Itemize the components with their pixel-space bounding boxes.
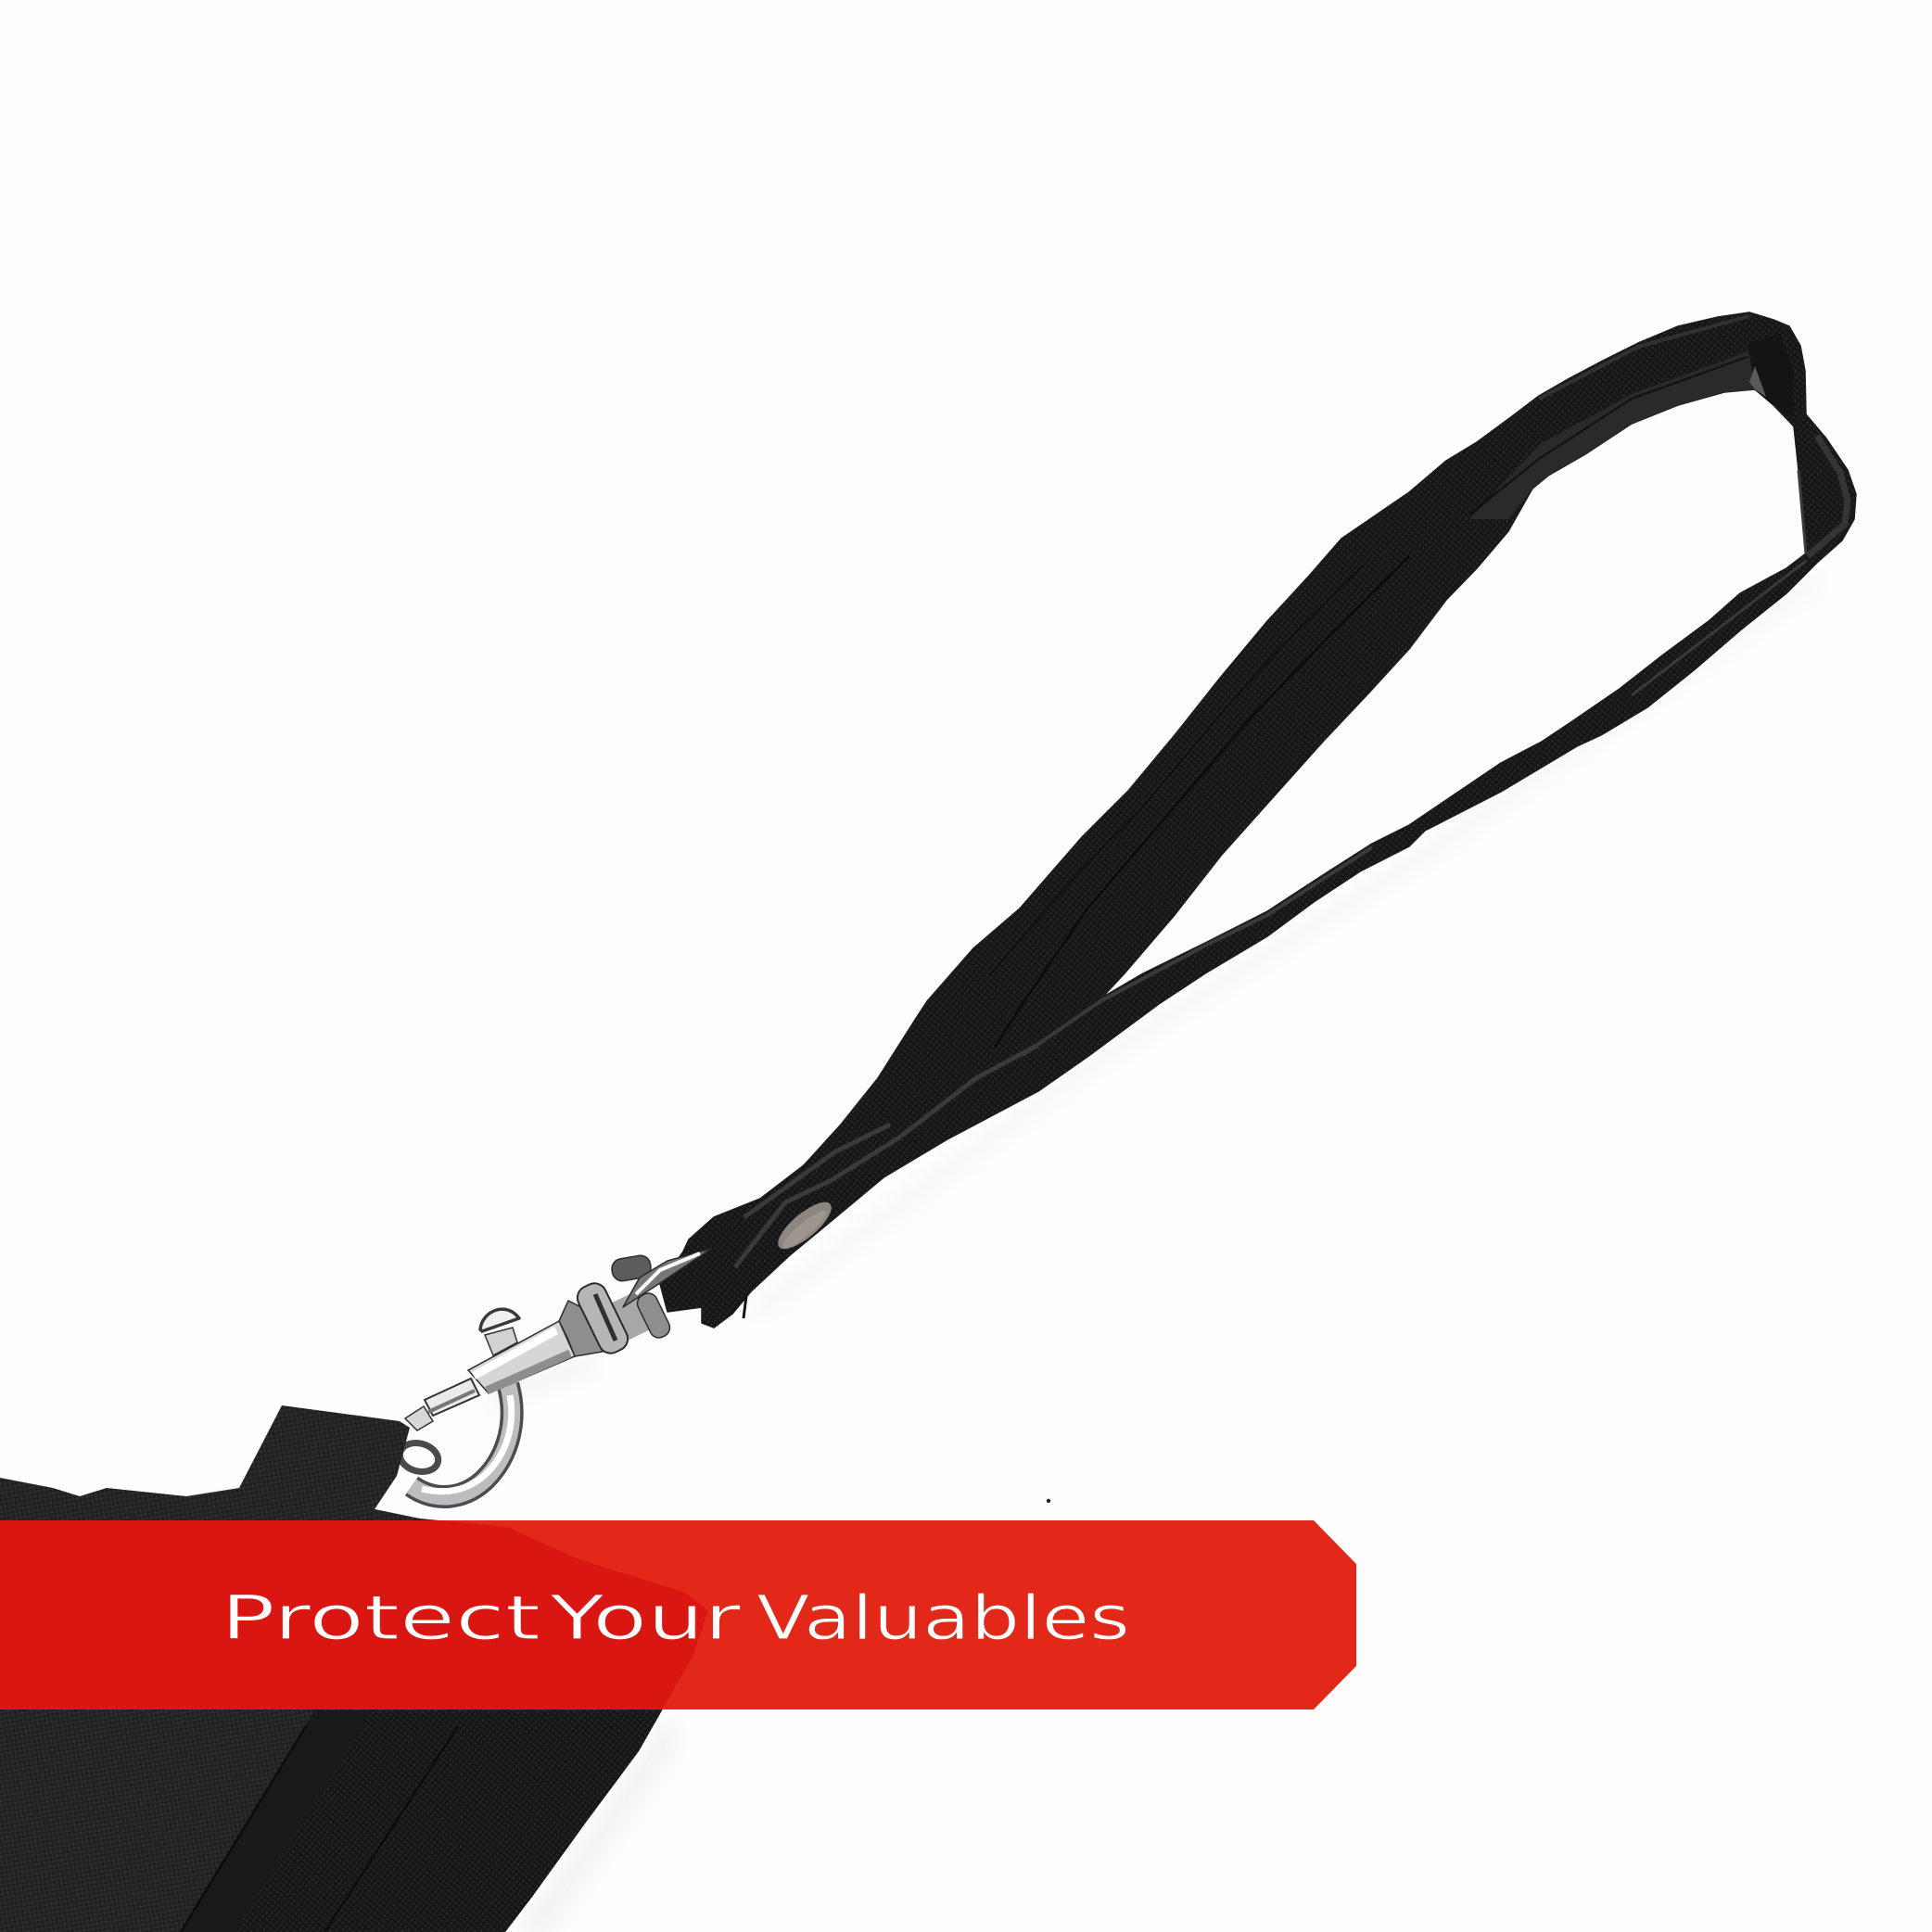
collar	[574, 1279, 631, 1357]
swivel neck	[606, 1290, 655, 1342]
strap stitching and folds	[989, 357, 1748, 1048]
thumb knob	[485, 1328, 517, 1355]
strap rivet	[771, 1195, 838, 1256]
hook curve	[412, 1385, 512, 1496]
banner text: Protect	[221, 1582, 540, 1654]
wrist strap: wide front band	[660, 312, 1806, 1328]
swivel eye spike	[623, 1249, 711, 1307]
small speck	[1047, 1499, 1050, 1503]
strap woven rope edges	[735, 316, 1848, 1267]
wrist strap: narrow back band	[714, 414, 1856, 1328]
swivel snap hook	[405, 1249, 711, 1496]
strap inner fold near loop top	[1469, 348, 1755, 519]
D ring	[397, 1439, 441, 1476]
pouch seam panel	[181, 1710, 373, 1932]
barrel	[468, 1321, 575, 1393]
banner shape	[0, 1520, 1356, 1710]
cone	[559, 1301, 604, 1356]
banner tint over pouch	[0, 1520, 708, 1710]
pouch loop tab	[239, 1405, 410, 1512]
banner text: Valuables	[756, 1582, 1130, 1654]
banner	[0, 1520, 1356, 1710]
lower ring	[634, 1290, 673, 1341]
banner text: Your	[549, 1582, 742, 1654]
pouch body	[0, 1478, 708, 1932]
back ring	[610, 1254, 653, 1282]
plunger pin	[405, 1406, 433, 1430]
banner text	[221, 1582, 1130, 1654]
soft shadows	[491, 579, 1817, 1932]
